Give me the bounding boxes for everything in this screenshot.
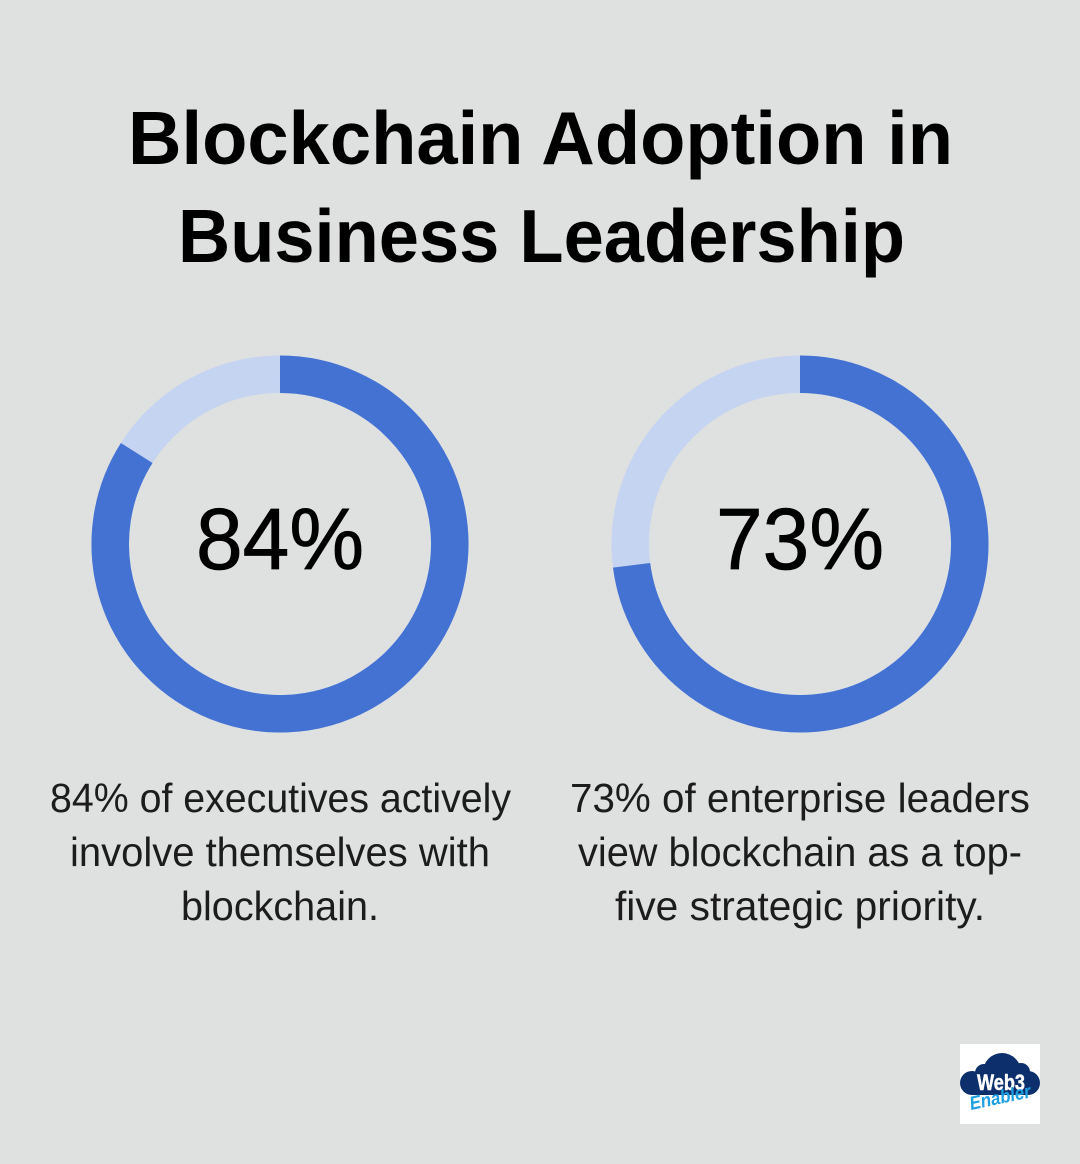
- logo: Web3 Enabler: Enabler: [968, 1081, 1034, 1115]
- title: Business Leadership: [178, 194, 905, 278]
- logo: Web3 Enabler: Web3: [977, 1070, 1025, 1095]
- title: [128, 96, 953, 278]
- description: 84%: involve themselves with: [70, 829, 490, 875]
- description: 84%: blockchain.: [181, 883, 379, 929]
- title: Blockchain Adoption in: [128, 96, 953, 180]
- panel: 73% of enterprise leaders: [570, 374, 1030, 929]
- description: 84%: [50, 775, 512, 929]
- icon: cloud: [960, 1053, 1040, 1095]
- panel: 84% of executives: [50, 374, 512, 929]
- description: 73%: five strategic priority.: [615, 883, 985, 929]
- stat: 73%: 73%: [716, 491, 884, 588]
- description: 73%: 73% of enterprise leaders: [570, 775, 1030, 821]
- logo: Web3 Enabler: [960, 1044, 1040, 1124]
- description: 73%: [570, 775, 1030, 929]
- description: 84%: 84% of executives actively: [50, 775, 512, 821]
- stat: 84%: 84%: [196, 491, 364, 588]
- description: 73%: view blockchain as a top-: [578, 829, 1022, 875]
- donut chart: 84%: [110, 374, 450, 714]
- donut chart: 73%: [630, 374, 970, 714]
